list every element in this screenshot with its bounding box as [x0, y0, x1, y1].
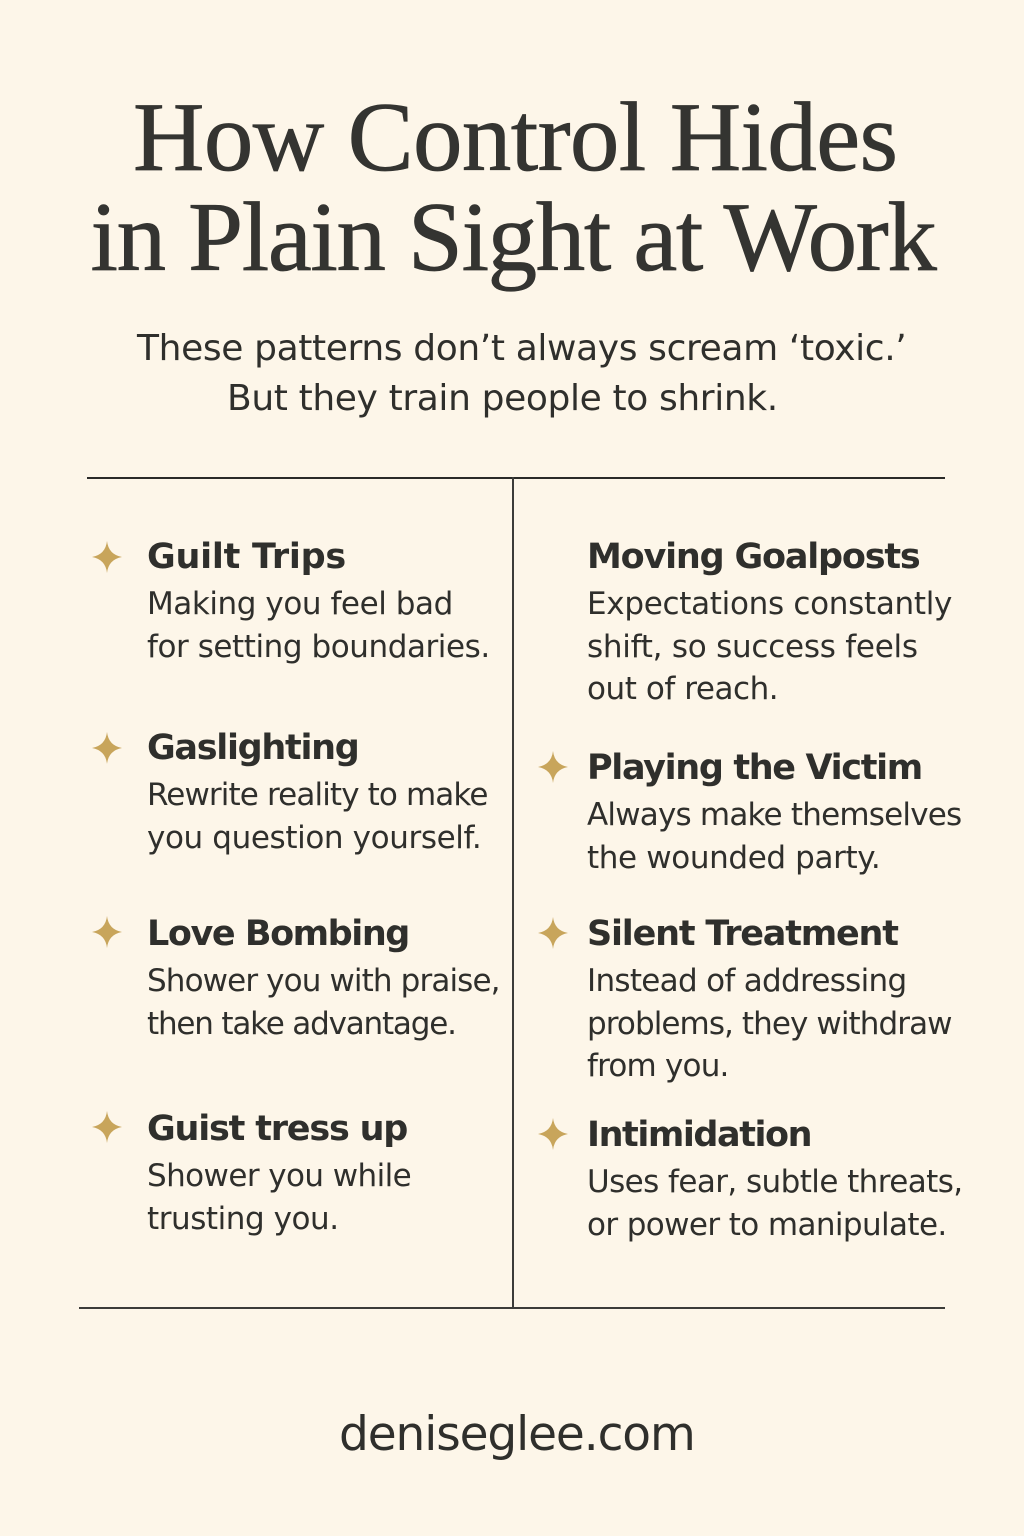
bottom rule: [79, 1307, 945, 1309]
item: guist tress up: Guist tress up: [147, 1109, 407, 1149]
item: guilt trips: for setting boundaries.: [147, 629, 490, 665]
item: playing the victim: the wounded party.: [587, 840, 880, 876]
subtitle: [136, 328, 906, 419]
icon: star guilt trips: [92, 541, 122, 573]
item: guist tress up: Shower you while: [147, 1158, 411, 1194]
item: playing the victim: Always make themselves: [587, 797, 961, 833]
item: playing the victim: Playing the Victim: [587, 748, 922, 788]
item: guilt trips: Making you feel bad: [147, 586, 453, 622]
footer: website: deniseglee.com: [339, 1407, 695, 1462]
item: gaslighting: Gaslighting: [147, 728, 359, 768]
icon: star love bombing: [92, 916, 122, 948]
item: silent treatment: Instead of addressing: [587, 963, 906, 999]
item: intimidation: Intimidation: [587, 1115, 811, 1155]
icon: star playing the victim: [538, 751, 568, 783]
item: gaslighting: [147, 728, 488, 856]
item: moving goalposts: [587, 537, 952, 707]
item: gaslighting: Rewrite reality to make: [147, 777, 488, 813]
item: love bombing: then take advantage.: [147, 1006, 456, 1042]
item: intimidation: [587, 1115, 963, 1243]
item: playing the victim: [587, 748, 961, 876]
icon: star silent treatment: [538, 917, 568, 949]
item: silent treatment: [587, 914, 952, 1084]
item: love bombing: [147, 914, 500, 1042]
item: gaslighting: you question yourself.: [147, 820, 481, 856]
subtitle: These patterns don’t always scream ‘toxic.’: [137, 328, 906, 369]
item: guist tress up: trusting you.: [147, 1201, 339, 1237]
item: moving goalposts: out of reach.: [587, 671, 778, 707]
icon: star gaslighting: [92, 732, 122, 764]
item: guilt trips: [147, 537, 490, 665]
item: intimidation: Uses fear, subtle threats,: [587, 1164, 963, 1200]
title: in Plain Sight at Work: [90, 183, 935, 292]
top rule: [87, 477, 945, 478]
item: moving goalposts: Expectations constantly: [587, 586, 952, 622]
icon: star guist tress up: [92, 1111, 122, 1143]
item: silent treatment: problems, they withdraw: [587, 1006, 952, 1042]
item: love bombing: Love Bombing: [147, 914, 409, 954]
icon: star intimidation: [538, 1118, 568, 1150]
item: moving goalposts: Moving Goalposts: [587, 537, 920, 577]
item: guilt trips: Guilt Trips: [147, 537, 346, 577]
item: intimidation: or power to manipulate.: [587, 1207, 947, 1243]
item: silent treatment: from you.: [587, 1048, 729, 1084]
column divider: [512, 477, 514, 1308]
item: love bombing: Shower you with praise,: [147, 963, 500, 999]
title: [90, 83, 938, 292]
title: How Control Hides: [133, 83, 897, 192]
item: silent treatment: Silent Treatment: [587, 914, 898, 954]
item: moving goalposts: shift, so success feels: [587, 629, 918, 665]
item: guist tress up: [147, 1109, 411, 1237]
subtitle: But they train people to shrink.: [227, 378, 778, 419]
